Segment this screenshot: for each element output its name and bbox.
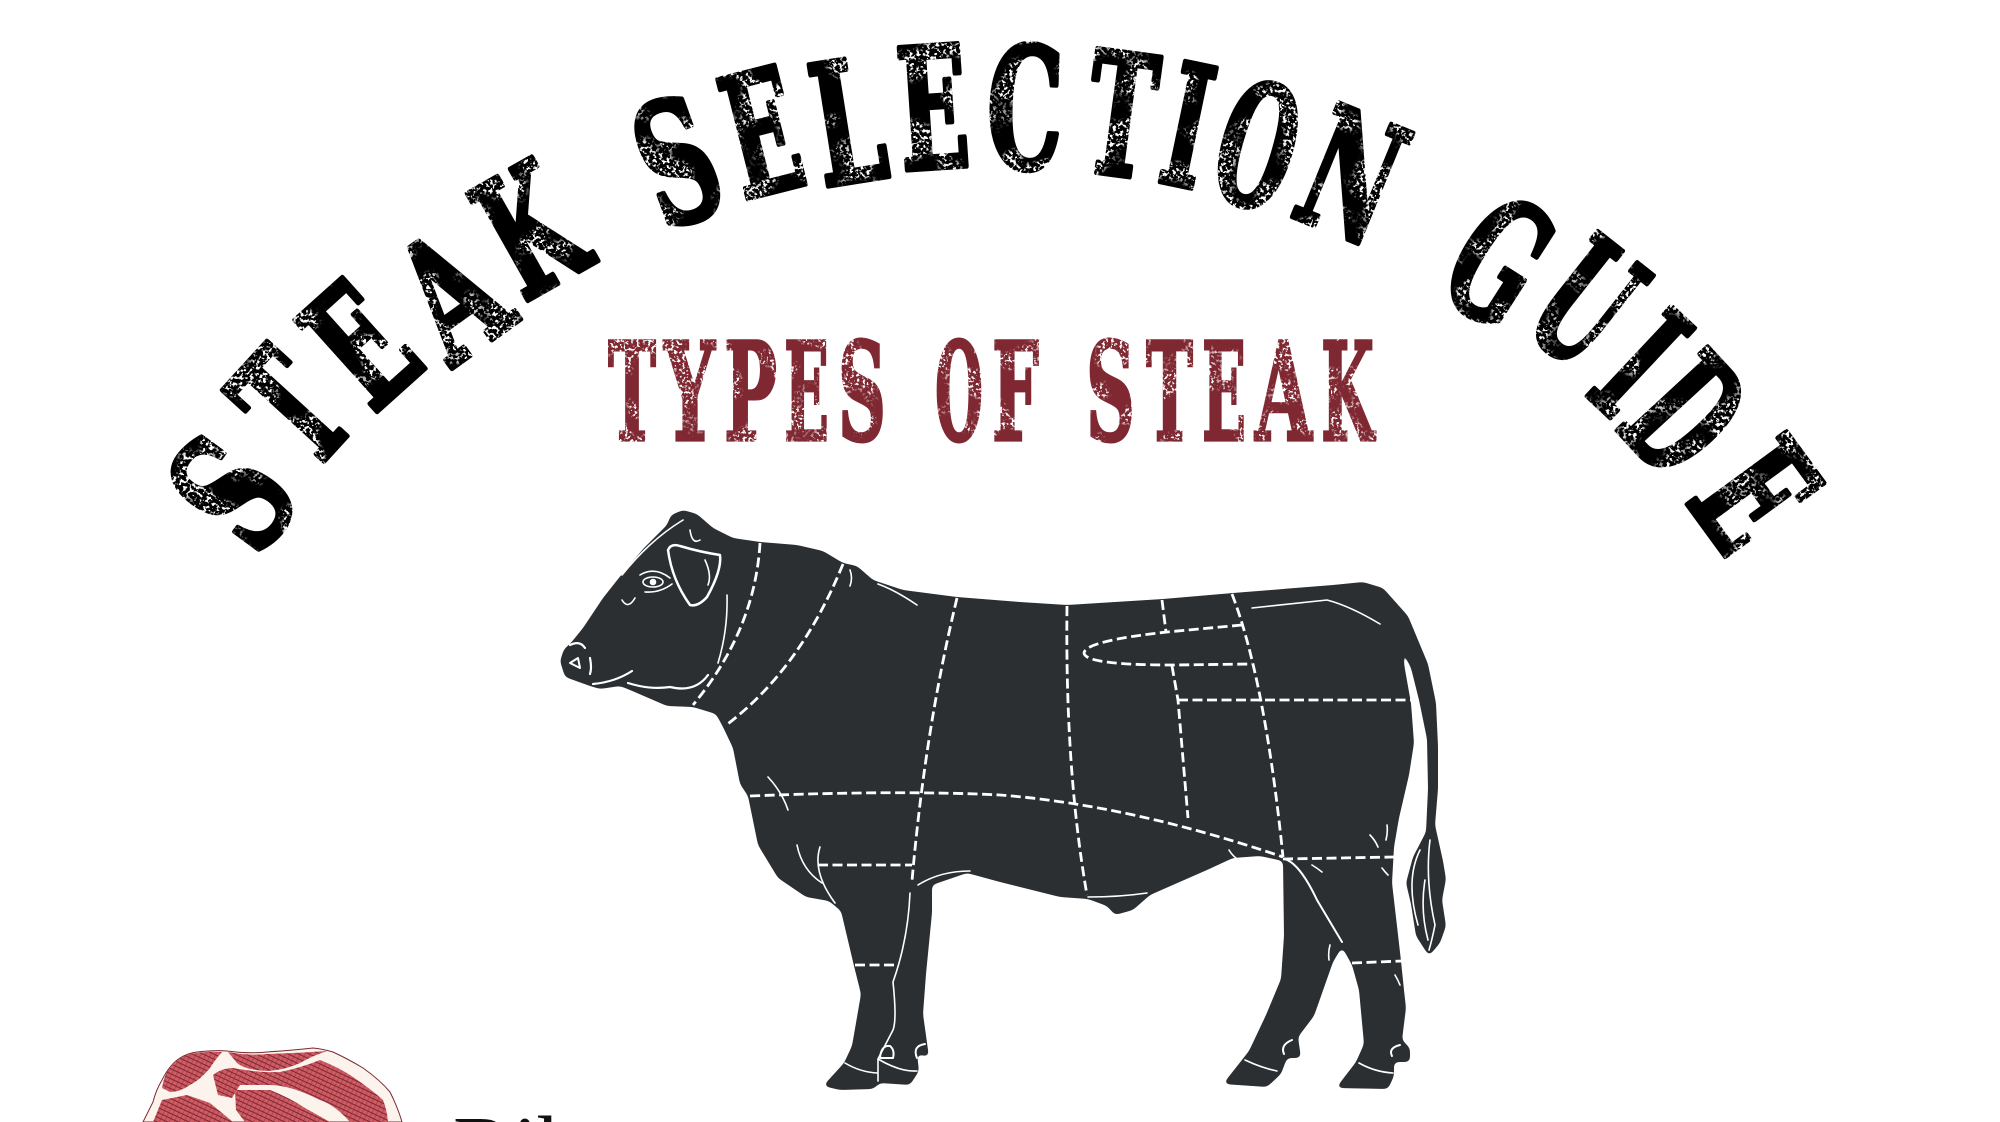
subtitle: TYPES OF STEAK: O xyxy=(935,313,983,473)
steak fat outline xyxy=(143,1048,402,1122)
steak illustration (ribeye, cropped by page bottom) xyxy=(143,1048,402,1122)
subtitle: TYPES OF STEAK: T xyxy=(1146,313,1193,473)
title: arched STEAK SELECTION GUIDE: U xyxy=(1494,201,1678,405)
infographic canvas: K xyxy=(1321,313,1376,473)
subtitle: TYPES OF STEAK: P xyxy=(724,313,777,473)
subtitle: TYPES OF STEAK: S xyxy=(838,313,886,473)
title: arched STEAK SELECTION GUIDE: N xyxy=(1273,68,1431,286)
title: arched STEAK SELECTION GUIDE: I xyxy=(1556,277,1722,450)
title: arched STEAK SELECTION GUIDE xyxy=(130,8,1857,585)
steak muscle sections xyxy=(153,1051,388,1122)
subtitle: TYPES OF STEAK: T xyxy=(608,313,656,473)
title: arched STEAK SELECTION GUIDE: O xyxy=(1193,41,1321,253)
subtitle: TYPES OF STEAK xyxy=(608,313,1376,473)
title: arched STEAK SELECTION GUIDE: K xyxy=(445,122,619,338)
title: arched STEAK SELECTION GUIDE: G xyxy=(1412,157,1586,367)
subtitle: TYPES OF STEAK: A xyxy=(1254,313,1313,473)
title: arched STEAK SELECTION GUIDE: A xyxy=(359,190,545,401)
title: arched STEAK SELECTION GUIDE: E xyxy=(1652,406,1857,585)
subtitle: TYPES OF STEAK: E xyxy=(1202,313,1246,473)
cut lines xyxy=(693,543,1413,965)
title: arched STEAK SELECTION GUIDE: T xyxy=(1074,13,1168,219)
title: arched STEAK SELECTION GUIDE: L xyxy=(798,20,898,226)
cow silhouette with butcher cut lines xyxy=(560,510,1446,1090)
title: arched STEAK SELECTION GUIDE: E xyxy=(704,29,820,239)
anatomy contour lines xyxy=(570,520,1435,1081)
title: arched STEAK SELECTION GUIDE: C xyxy=(984,9,1066,209)
title: arched STEAK SELECTION GUIDE: E xyxy=(267,247,456,445)
subtitle: TYPES OF STEAK: S xyxy=(1086,313,1135,473)
cow body xyxy=(560,510,1446,1090)
title: arched STEAK SELECTION GUIDE: S xyxy=(130,403,336,583)
title: arched STEAK SELECTION GUIDE: T xyxy=(195,316,388,501)
title: arched STEAK SELECTION GUIDE: E xyxy=(892,8,975,210)
title: arched STEAK SELECTION GUIDE: D xyxy=(1584,319,1784,512)
title: arched STEAK SELECTION GUIDE: I xyxy=(1147,26,1229,228)
subtitle: TYPES OF STEAK: Y xyxy=(663,313,716,473)
subtitle: TYPES OF STEAK: F xyxy=(992,313,1039,473)
subtitle: TYPES OF STEAK: E xyxy=(784,313,829,473)
title: arched STEAK SELECTION GUIDE: S xyxy=(609,57,746,269)
